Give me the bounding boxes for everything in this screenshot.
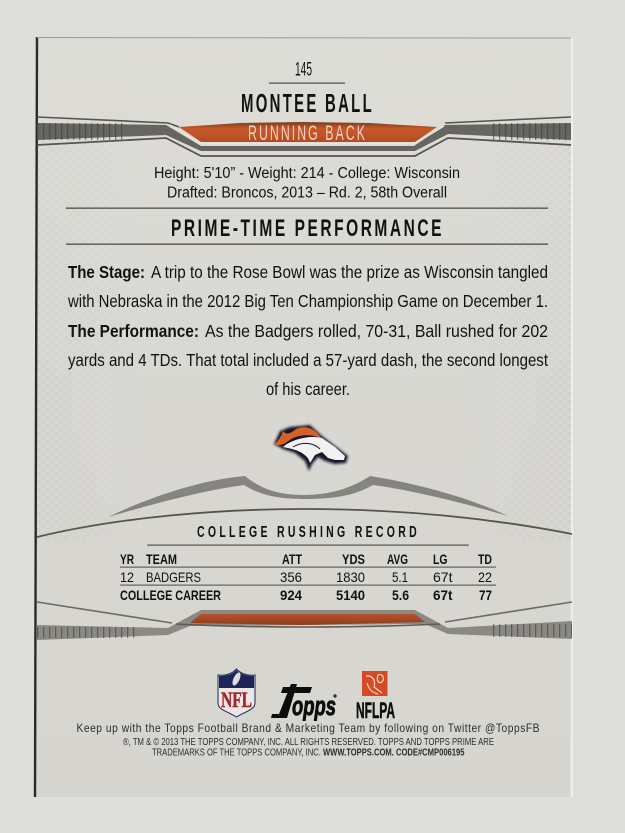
table header row: [120, 551, 492, 567]
career row: 924: [280, 587, 302, 603]
footer text: [76, 721, 540, 758]
table header row: AVG: [387, 551, 408, 567]
body text: The Stage:: [68, 262, 145, 282]
career row: 67t: [433, 587, 453, 603]
body text: A trip to the Rose Bowl was the prize as Wisconsin tangled: [151, 262, 548, 282]
footer text: Keep up with the Topps Football Brand & Marketing Team by following on Twitter @ToppsFB: [76, 721, 540, 735]
season row: 12: [120, 569, 134, 585]
career row: COLLEGE CAREER: [120, 587, 221, 603]
card number: [269, 60, 345, 84]
bottom banner: [37, 602, 572, 640]
stats frame arc: [37, 476, 572, 537]
player bio: Drafted: Broncos, 2013 – Rd. 2, 58th Overall: [167, 184, 447, 202]
body text: of his career.: [266, 379, 350, 399]
card panel: [34, 37, 572, 797]
icon: Topps logo: [271, 684, 337, 721]
career row: 77: [479, 587, 492, 603]
body text: [67, 262, 548, 399]
table header row: LG: [433, 551, 448, 567]
career row: [120, 587, 492, 603]
top banner: [37, 117, 571, 156]
icon: NFL shield: [218, 669, 255, 717]
icon: Topps logo: opps: [292, 691, 336, 721]
position label: RUNNING BACK: [248, 122, 367, 145]
body text: The Performance:: [68, 321, 199, 341]
table header row: TD: [478, 551, 492, 567]
player bio: [154, 165, 460, 202]
season row: [120, 569, 492, 585]
footer text: TRADEMARKS OF THE TOPPS COMPANY, INC. WWW.TOPPS.COM. CODE#CMP006195: [152, 746, 465, 758]
table header row: ATT: [282, 551, 302, 567]
body text: yards and 4 TDs. That total included a 57-yard dash, the second longest: [68, 350, 548, 370]
section heading: PRIME-TIME PERFORMANCE: [171, 215, 444, 242]
card number: 145: [295, 60, 312, 80]
icon: Broncos horse logo: [274, 425, 348, 471]
player bio: Height: 5'10” - Weight: 214 - College: Wisconsin: [154, 165, 460, 182]
player name: MONTEE BALL: [241, 88, 374, 118]
table header row: YR: [120, 551, 134, 567]
icon: NFL shield: NFL: [221, 687, 252, 712]
icon: NFLPA logo: [356, 671, 395, 723]
career row: 5.6: [392, 587, 409, 603]
stats heading: COLLEGE RUSHING RECORD: [197, 524, 420, 541]
season row: BADGERS: [146, 569, 201, 585]
footer text: ®, TM & © 2013 THE TOPPS COMPANY, INC. ALL RIGHTS RESERVED. TOPPS AND TOPPS PRIME ARE: [123, 736, 494, 748]
season row: 1830: [336, 569, 365, 585]
season row: 356: [280, 569, 302, 585]
body text: As the Badgers rolled, 70-31, Ball rushed for 202: [205, 321, 548, 341]
season row: 5.1: [392, 569, 408, 585]
body text: with Nebraska in the 2012 Big Ten Championship Game on December 1.: [67, 291, 548, 311]
stats table: [120, 551, 496, 603]
table header row: YDS: [342, 551, 365, 567]
table header row: TEAM: [146, 551, 177, 567]
career row: 5140: [336, 587, 365, 603]
season row: 22: [478, 569, 492, 585]
season row: 67t: [433, 569, 453, 585]
icon: NFLPA logo: NFLPA: [356, 698, 395, 723]
